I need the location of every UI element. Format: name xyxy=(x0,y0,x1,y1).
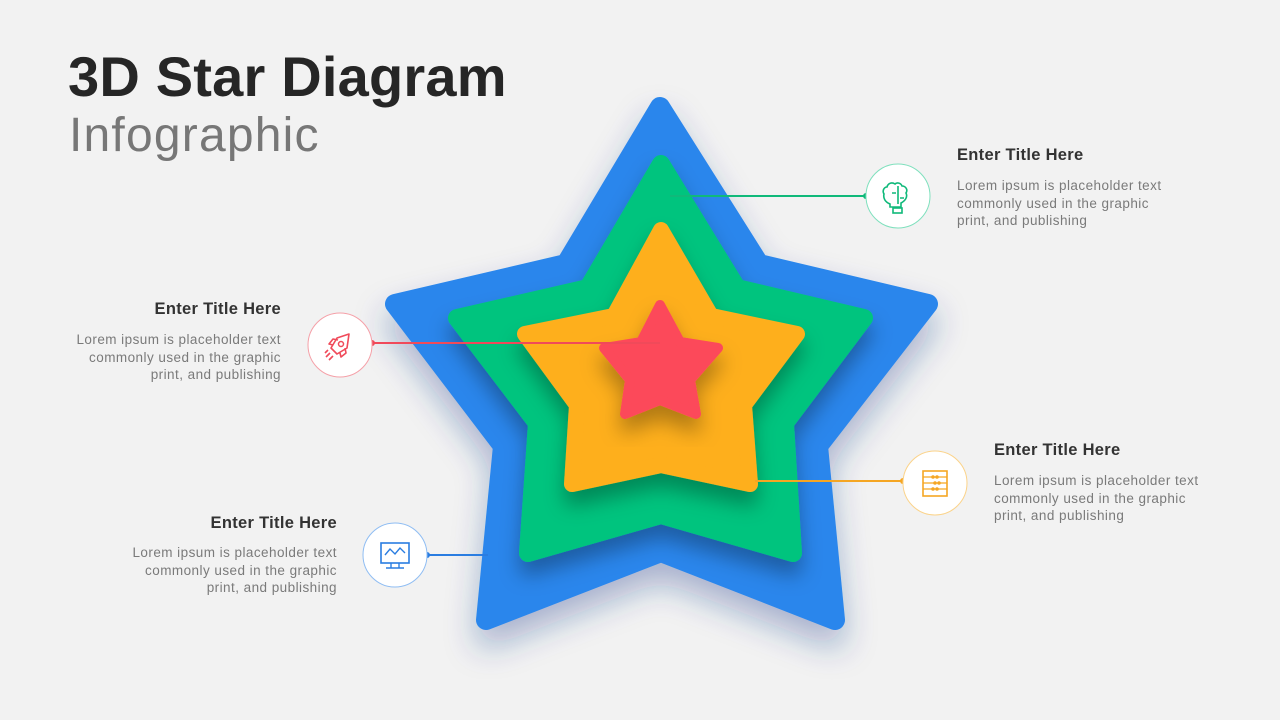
icon: monitor chart xyxy=(363,523,427,587)
text: print, and publishing xyxy=(151,367,281,382)
text: Lorem ipsum is placeholder text xyxy=(994,473,1199,488)
text: commonly used in the graphic xyxy=(994,490,1186,506)
text: commonly used in the graphic xyxy=(89,350,281,364)
text: print, and publishing xyxy=(207,580,337,595)
text block: yellow xyxy=(994,441,1199,523)
icon: brain bulb xyxy=(866,164,930,228)
text: Lorem ipsum is placeholder text xyxy=(132,545,337,560)
text: print, and publishing xyxy=(957,213,1087,228)
text block: red xyxy=(76,300,281,382)
green star xyxy=(457,164,864,553)
text: Lorem ipsum is placeholder text xyxy=(957,178,1162,193)
text block: blue xyxy=(132,514,337,595)
yellow star xyxy=(525,230,797,484)
red star xyxy=(604,305,718,414)
text: print, and publishing xyxy=(994,508,1124,523)
subtitle: Infographic xyxy=(69,109,320,162)
icon: rocket xyxy=(308,313,372,377)
blue star xyxy=(395,107,928,620)
title: 3D Star Diagram xyxy=(68,45,507,108)
text block: green xyxy=(957,146,1162,228)
text: commonly used in the graphic xyxy=(957,196,1149,210)
text: Enter Title Here xyxy=(155,300,281,318)
text: commonly used in the graphic xyxy=(145,562,337,578)
text: Lorem ipsum is placeholder text xyxy=(76,332,281,347)
text: Enter Title Here xyxy=(957,146,1083,164)
icon: abacus xyxy=(903,451,967,515)
text: Enter Title Here xyxy=(211,514,337,532)
connector lines xyxy=(369,193,906,558)
text: Enter Title Here xyxy=(994,441,1120,459)
